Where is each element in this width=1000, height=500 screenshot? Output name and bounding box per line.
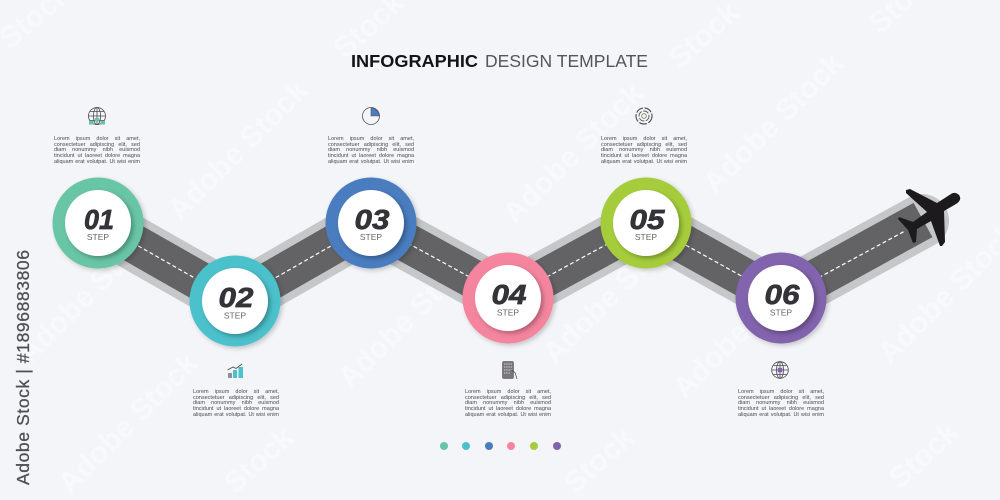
text block 1: diam nonummy nibh euismod: [54, 147, 140, 153]
step 05 badge: STEP: [635, 232, 657, 242]
icon: pie chart: [362, 108, 380, 124]
icon: growth chart: [228, 364, 243, 378]
step 04 badge: 04: [492, 279, 527, 310]
watermark pattern: Adobe Stock: [332, 242, 485, 395]
text block 3: diam nonummy nibh euismod: [328, 147, 414, 153]
icon: globe network: [88, 108, 106, 124]
watermark pattern: Adobe Stock: [667, 252, 820, 405]
icon: calculator in hand: [502, 362, 517, 379]
watermark pattern: Adobe Stock: [162, 74, 315, 227]
text block 5: aliquam erat volutpat. Ut wisi enim: [601, 159, 687, 165]
text block 4: Lorem ipsum dolor sit amet,: [465, 389, 551, 395]
text block 4: [465, 389, 552, 418]
text block 4: diam nonummy nibh euismod: [465, 400, 551, 406]
text block 6: diam nonummy nibh euismod: [738, 400, 824, 406]
watermark pattern: Adobe Stock: [12, 217, 165, 370]
step 01 badge: STEP: [87, 232, 109, 242]
text block 6: tincidunt ut laoreet dolore magna: [738, 406, 824, 412]
text block 3: aliquam erat volutpat. Ut wisi enim: [328, 159, 414, 165]
text block 2: [193, 389, 280, 418]
text block 5: tincidunt ut laoreet dolore magna: [601, 153, 687, 159]
icon: globe: [772, 362, 788, 378]
text block 4: consectetuer adipiscing elit, sed: [465, 395, 551, 401]
title: INFOGRAPHIC: [351, 51, 478, 71]
text block 1: consectetuer adipiscing elit, sed: [54, 142, 140, 148]
watermark pattern: Stock: [558, 421, 641, 500]
text block 5: consectetuer adipiscing elit, sed: [601, 142, 687, 148]
step 02 badge: STEP: [224, 310, 246, 320]
watermark pattern: Stock: [218, 421, 301, 500]
road: [98, 220, 923, 301]
text block 6: aliquam erat volutpat. Ut wisi enim: [738, 412, 824, 418]
watermark pattern: Adobe Stock: [697, 47, 850, 200]
text block 1: aliquam erat volutpat. Ut wisi enim: [54, 159, 140, 165]
title: [351, 51, 648, 71]
watermark pattern: Adobe Stock: [497, 77, 650, 230]
step 05 badge: 05: [630, 204, 665, 235]
step 01 badge: [52, 178, 144, 268]
text block 3: Lorem ipsum dolor sit amet,: [328, 136, 414, 142]
text block 4: tincidunt ut laoreet dolore magna: [465, 406, 551, 412]
icon: target cycle: [636, 108, 652, 124]
text block 2: tincidunt ut laoreet dolore magna: [193, 406, 279, 412]
text block 1: Lorem ipsum dolor sit amet,: [54, 136, 140, 142]
text block 2: consectetuer adipiscing elit, sed: [193, 395, 279, 401]
title: DESIGN TEMPLATE: [485, 51, 648, 71]
step 05 badge: [600, 178, 692, 268]
text block 3: [328, 136, 414, 165]
step 02 badge: [190, 256, 280, 346]
watermark pattern: Stock: [883, 416, 966, 495]
text block 1: tincidunt ut laoreet dolore magna: [54, 153, 140, 159]
step 03 badge: [326, 178, 416, 268]
step 03 badge: 03: [354, 204, 390, 235]
text block 6: Lorem ipsum dolor sit amet,: [738, 389, 824, 395]
text block 5: Lorem ipsum dolor sit amet,: [601, 136, 687, 142]
step 06 badge: [736, 252, 826, 344]
text block 4: aliquam erat volutpat. Ut wisi enim: [465, 412, 551, 418]
step 06 badge: STEP: [770, 308, 792, 318]
text block 1: [54, 136, 140, 165]
stock id side text: Adobe Stock | #1896883806: [13, 250, 33, 485]
text block 3: consectetuer adipiscing elit, sed: [328, 142, 414, 148]
text block 5: [601, 136, 688, 165]
text block 6: consectetuer adipiscing elit, sed: [738, 395, 824, 401]
text block 2: diam nonummy nibh euismod: [193, 400, 279, 406]
text block 2: aliquam erat volutpat. Ut wisi enim: [193, 412, 279, 418]
step 01 badge: 01: [84, 204, 114, 235]
step 02 badge: 02: [218, 282, 254, 313]
watermark pattern: Adobe Stock: [52, 347, 205, 500]
text block 2: Lorem ipsum dolor sit amet,: [193, 389, 279, 395]
pagination dots: [440, 442, 561, 450]
text block 6: [738, 389, 824, 418]
step 06 badge: 06: [764, 279, 800, 310]
step 03 badge: STEP: [360, 232, 382, 242]
icon: airplane: [898, 189, 960, 246]
step 04 badge: [462, 252, 554, 344]
text block 5: diam nonummy nibh euismod: [601, 147, 687, 153]
watermark pattern: Adobe Stock: [537, 217, 690, 370]
step 04 badge: STEP: [497, 308, 519, 318]
text block 3: tincidunt ut laoreet dolore magna: [328, 153, 414, 159]
